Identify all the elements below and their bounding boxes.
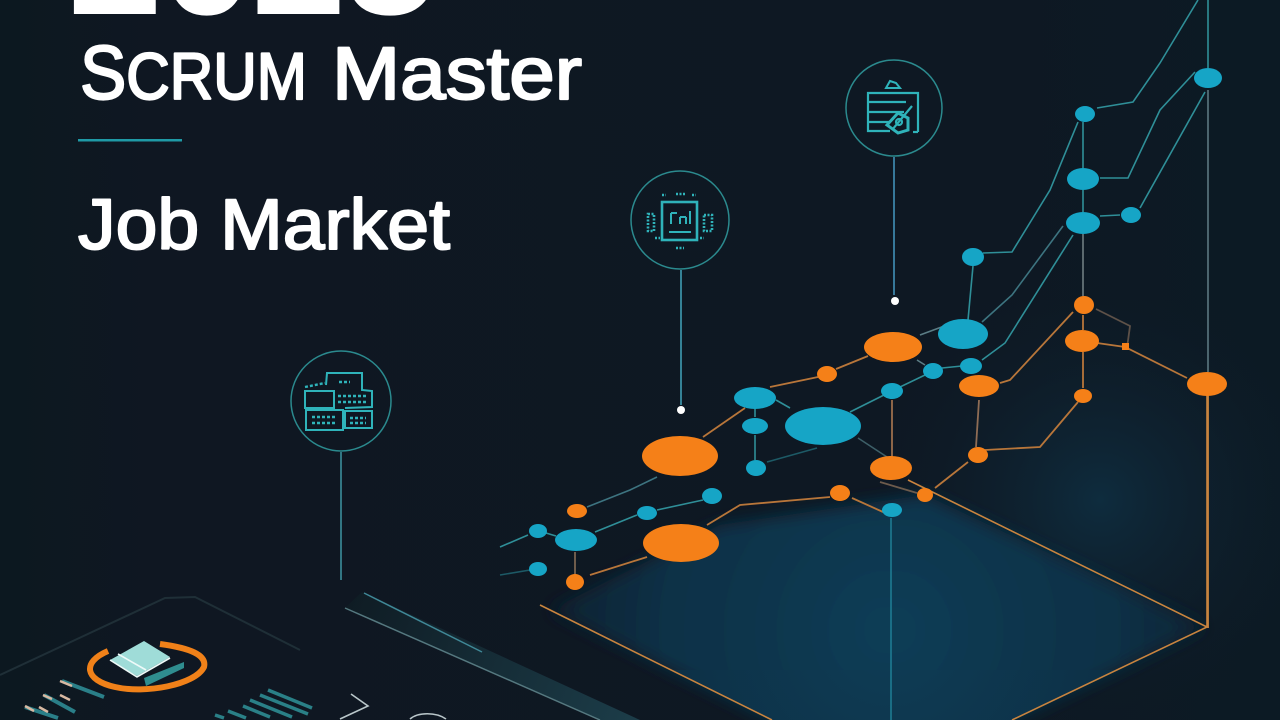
icon: orange ring with card stack [90,641,204,689]
device outline [0,597,300,675]
icon: chip [648,194,712,248]
heading: Job Market: Job Market [78,186,450,265]
icon: report with badge [868,81,918,133]
blue network lines [500,0,1208,575]
chart bars: centre [215,690,312,718]
callout: chip icon [631,171,729,414]
heading: Scrum: SCRUM [80,31,307,116]
heading: Master: Master [332,32,582,115]
callout: team plan icon [291,351,391,580]
accent divider [78,139,182,142]
blue nodes [529,68,1222,576]
orange nodes [566,296,1227,590]
callout: report icon [846,60,942,305]
platform edge band [345,592,640,720]
icon: blocks [305,373,372,430]
isometric floor plane [540,395,1207,720]
title [68,0,582,265]
pin dot [677,406,685,414]
orange network lines [575,309,1208,628]
chart bars: left [25,681,104,718]
pin dot [891,297,899,305]
bracket and arc outline [340,694,446,719]
